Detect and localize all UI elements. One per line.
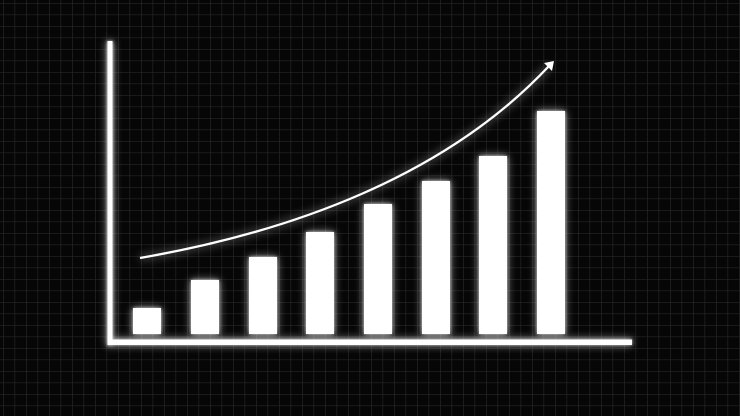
bars: [133, 111, 565, 334]
bar 8: [537, 111, 565, 334]
bar 2: [191, 280, 219, 334]
arrow: rising trend curve: [140, 61, 554, 258]
bar 4: [306, 232, 334, 334]
bar 6: [422, 181, 450, 334]
bar 3: [249, 257, 277, 334]
bar 5: [364, 204, 392, 334]
chart tight glow: [107, 41, 632, 346]
bar 1: [133, 308, 161, 334]
chart wide glow: [107, 41, 632, 346]
vertical axis: [108, 41, 112, 345]
horizontal axis: [108, 340, 632, 345]
bar 7: [479, 156, 507, 334]
